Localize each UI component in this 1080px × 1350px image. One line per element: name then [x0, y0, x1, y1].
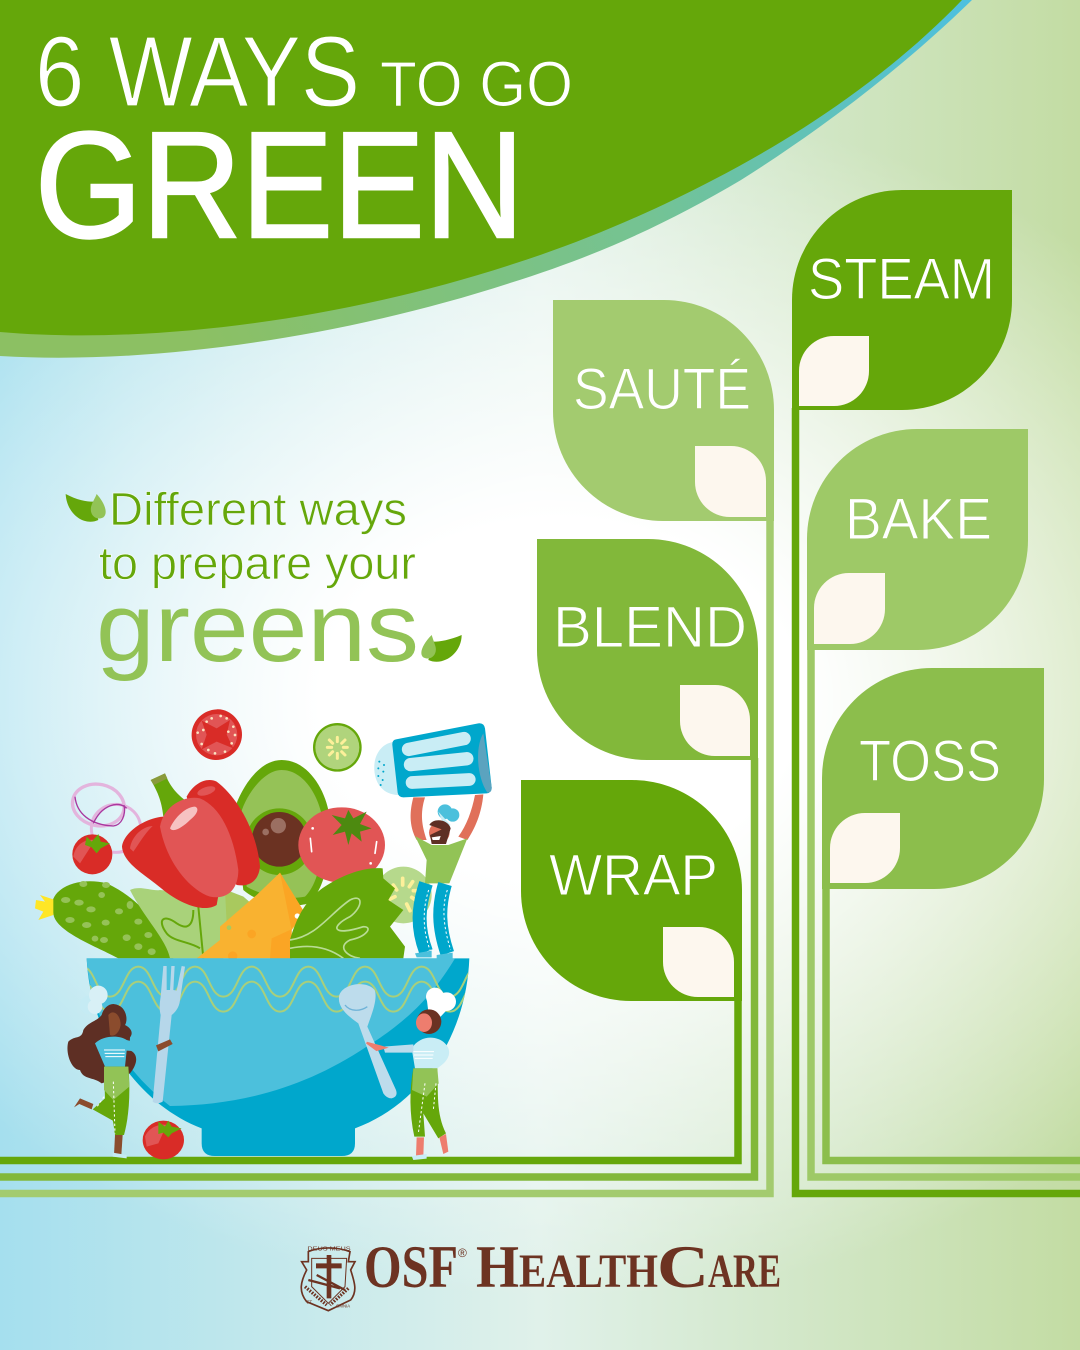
leaf: wrap: WRAP: [549, 843, 718, 908]
leaf: toss: TOSS: [859, 729, 1001, 794]
subheading: different ways to prepare your greens: to prepare your: [99, 537, 416, 589]
leaf: toss: [822, 668, 1044, 889]
icon: shield crest: [301, 1247, 355, 1311]
subheading: different ways to prepare your greens: [96, 483, 419, 682]
leaf: blend: BLEND: [553, 595, 747, 660]
icon: cheese: [197, 873, 305, 961]
leaf: steam: [792, 190, 1012, 410]
leaf: wrap: [521, 780, 742, 1001]
logo: OSF HealthCare: ARE: [708, 1245, 781, 1298]
icon: leaf pair before text: [66, 494, 106, 522]
logo: OSF HealthCare: ®: [458, 1246, 467, 1260]
logo: OSF HealthCare: H: [476, 1234, 519, 1300]
title: TO GO: [380, 48, 573, 120]
figure: woman with fork: [67, 986, 173, 1158]
icon: shield crest: DEUS MEUS: [307, 1247, 351, 1253]
leaf: steam: STEAM: [808, 247, 995, 312]
icon: big tomato: [298, 807, 385, 883]
leaf: bake: BAKE: [845, 487, 992, 552]
icon: spoon: [339, 984, 397, 1098]
bowl: [82, 958, 478, 1156]
logo: OSF HealthCare: [301, 1234, 781, 1311]
icon: pickle: [35, 881, 173, 958]
icon: onion rings: [69, 779, 141, 852]
leaf: bake: [807, 429, 1028, 650]
subheading: different ways to prepare your greens: Different ways: [109, 483, 407, 535]
icon: dark lettuce: [290, 868, 405, 958]
icon: cucumber behind man: [375, 867, 432, 923]
leaf: blend: [537, 539, 758, 760]
figure: man with shaker: [411, 794, 483, 959]
icon: bell pepper: [122, 773, 260, 908]
icon: salt shaker: [374, 723, 492, 797]
icon: avocado: [233, 760, 329, 905]
title: [35, 16, 573, 269]
icon: cucumber slice: [313, 723, 362, 772]
title: GREEN: [35, 100, 524, 269]
icon: tomato slice: [192, 709, 242, 760]
leaf: sauté: SAUTÉ: [573, 357, 751, 422]
title: 6 WAYS: [35, 16, 360, 128]
icon: small tomato: [72, 834, 112, 874]
leaf: sauté: [553, 300, 774, 521]
header swoosh: [0, 0, 972, 358]
icon: leaf pair after greens: [421, 635, 462, 662]
icon: shield crest: ET: [307, 1299, 313, 1304]
logo: OSF HealthCare: OSF: [364, 1234, 458, 1300]
illustration: salad bowl with chefs: [35, 709, 492, 1160]
subheading: different ways to prepare your greens: greens: [96, 573, 419, 682]
logo: OSF HealthCare: C: [657, 1234, 709, 1300]
logo: OSF HealthCare: EALTH: [519, 1245, 658, 1298]
icon: shield crest: OMNIA: [336, 1303, 350, 1308]
icon: ground tomato: [143, 1121, 184, 1159]
plant stems: [0, 408, 1080, 1194]
icon: light lettuce: [130, 888, 257, 958]
icon: fork: [153, 966, 185, 1103]
figure: woman with spoon: [367, 988, 456, 1160]
